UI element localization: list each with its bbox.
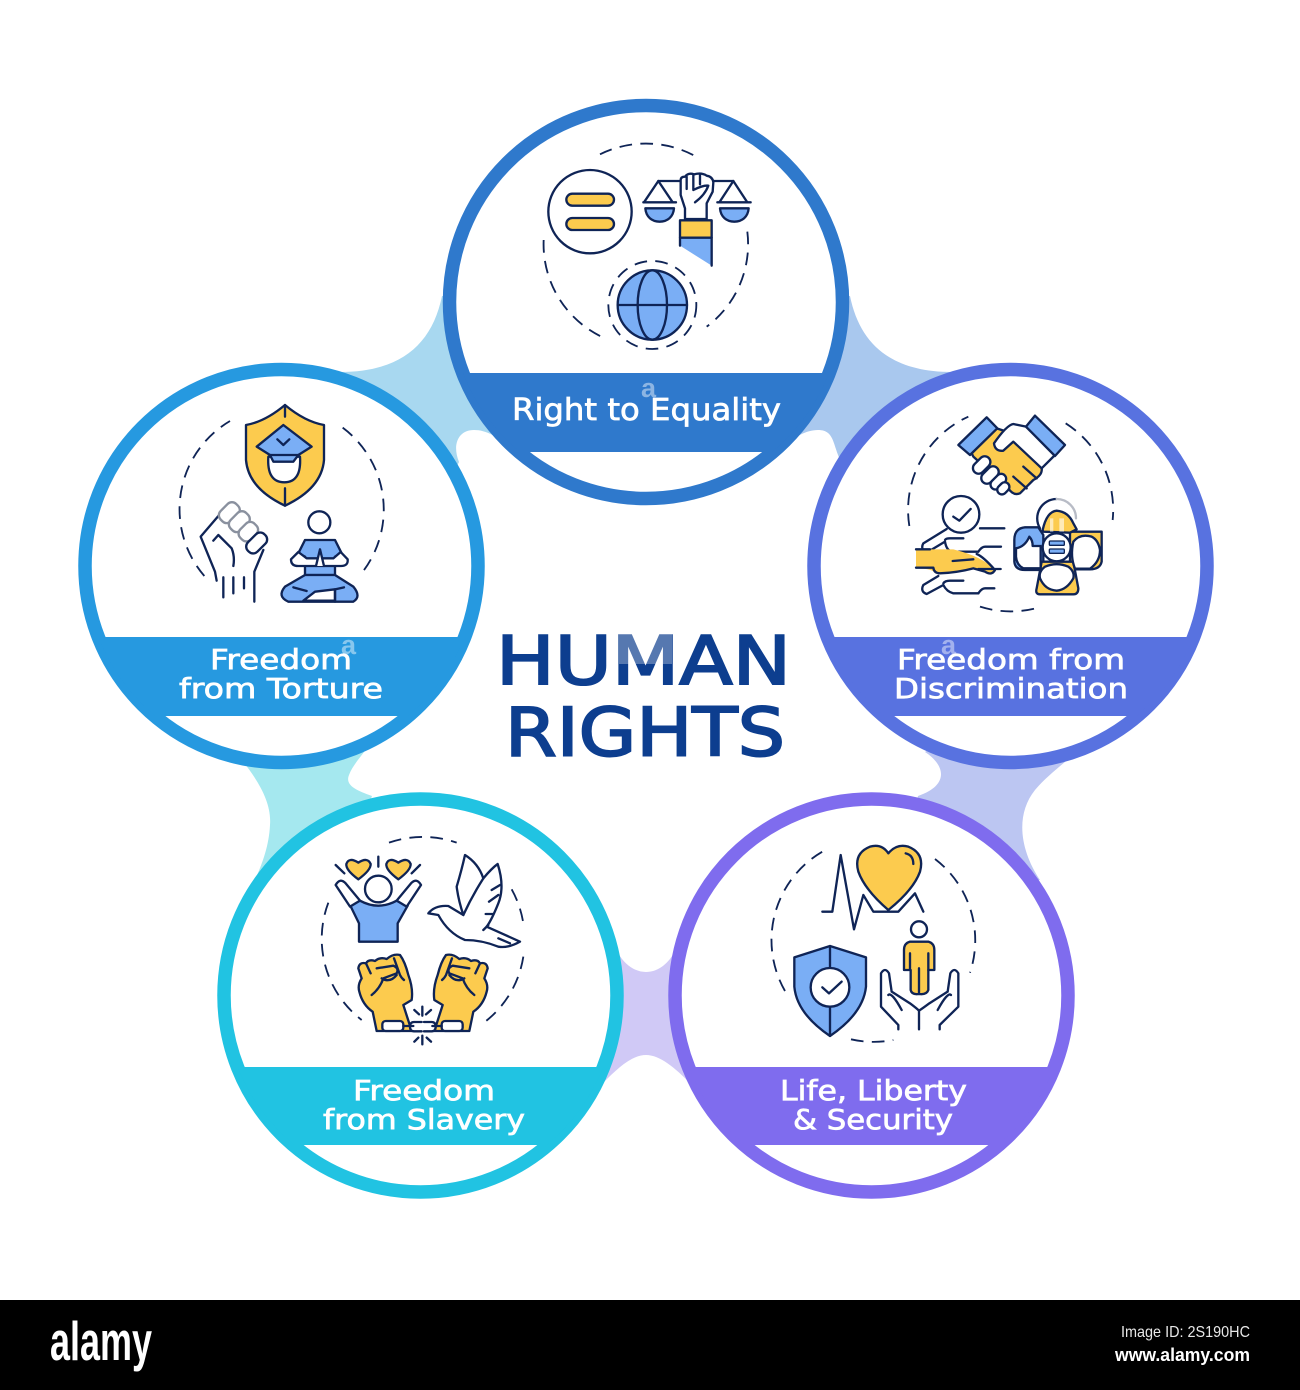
label band xyxy=(98,637,464,716)
label: from Slavery xyxy=(323,1104,525,1136)
label: Right to Equality xyxy=(512,393,781,428)
connector: life to slavery xyxy=(570,953,720,1083)
icon: left fist xyxy=(358,955,412,1031)
label: & Security xyxy=(793,1104,953,1136)
icon: equal sign xyxy=(548,170,632,253)
label: from Torture xyxy=(179,673,383,705)
dashed orbit xyxy=(544,144,748,338)
title watermark tint xyxy=(619,633,672,664)
icon: broken chains and fists xyxy=(358,955,488,1044)
icon: police shield xyxy=(246,405,324,506)
panel: freedom from discrimination xyxy=(814,370,1207,762)
label band xyxy=(688,1067,1054,1145)
icon: helping hands with check xyxy=(916,496,1004,594)
panel: freedom from slavery xyxy=(224,799,617,1192)
title: RIGHTS xyxy=(505,694,785,772)
icon: heart, shield and protected person xyxy=(771,846,975,1042)
connector: right to life xyxy=(900,700,1072,880)
icon: fist with scales xyxy=(643,174,751,266)
image id: Image ID: 2S190HC xyxy=(1121,1324,1250,1341)
label xyxy=(894,644,1128,705)
watermark marks: a xyxy=(341,630,357,660)
dashed orbit xyxy=(771,849,975,1042)
footer bar xyxy=(0,1300,1300,1390)
label: Freedom xyxy=(353,1075,495,1107)
dashed orbit xyxy=(322,837,523,1022)
icon: person in hands xyxy=(881,921,958,1029)
title: HUMAN xyxy=(496,622,791,700)
ring xyxy=(675,799,1068,1192)
label band xyxy=(238,1067,604,1145)
panel: freedom from torture xyxy=(85,370,478,762)
label: Life, Liberty xyxy=(780,1075,967,1107)
label xyxy=(179,644,383,705)
label: Freedom xyxy=(210,644,352,676)
icon: equal people xyxy=(1014,499,1102,594)
panel: life, liberty and security xyxy=(675,799,1068,1192)
connector: top to left xyxy=(340,296,560,520)
icon: right fist xyxy=(434,955,488,1031)
label: Freedom from xyxy=(897,644,1125,676)
watermark marks xyxy=(341,373,957,660)
label band xyxy=(828,637,1194,716)
ring xyxy=(224,799,617,1192)
connector: top to right xyxy=(740,296,952,520)
icon: meditating person xyxy=(282,511,357,602)
ring xyxy=(450,106,842,498)
connector: slavery to left xyxy=(232,700,372,880)
label xyxy=(780,1075,967,1136)
panel: right to equality xyxy=(450,106,842,498)
label xyxy=(323,1075,525,1136)
icon: globe xyxy=(618,270,687,340)
icon: handshake xyxy=(958,416,1065,496)
footer logo: alamy xyxy=(50,1310,152,1372)
icon: handshake, hands and people xyxy=(908,416,1113,611)
title xyxy=(496,622,791,772)
website: www.alamy.com xyxy=(1114,1345,1250,1365)
label: Discrimination xyxy=(894,673,1128,705)
icon: joyful person with hearts xyxy=(336,857,421,942)
icon: dove xyxy=(428,855,520,947)
icon: joyful person, dove and broken chains xyxy=(322,837,523,1044)
watermark marks: a xyxy=(941,630,957,660)
ring xyxy=(814,370,1207,762)
icon: shield, fist and meditating person xyxy=(180,405,384,602)
label band xyxy=(463,373,829,452)
icon: equality, justice and globe xyxy=(544,144,751,349)
dashed orbit xyxy=(180,421,384,576)
watermark marks: a xyxy=(641,373,657,403)
icon: heart with pulse xyxy=(822,846,923,929)
icon: shield with check xyxy=(794,946,866,1036)
icon: raised fist xyxy=(201,500,270,602)
dashed orbit xyxy=(908,417,1113,611)
ring xyxy=(85,370,478,762)
